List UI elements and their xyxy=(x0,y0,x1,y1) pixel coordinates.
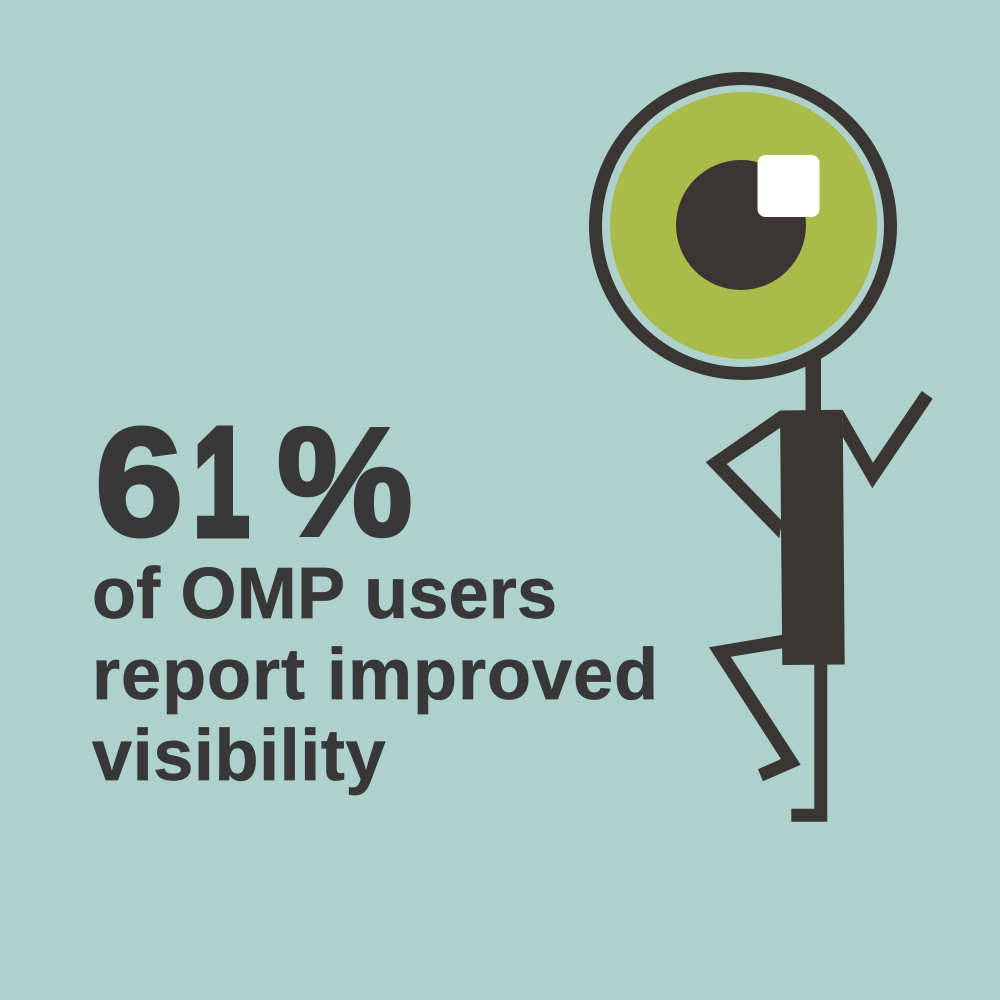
text line 2: report improved xyxy=(92,635,659,715)
body xyxy=(780,410,845,665)
neck xyxy=(806,355,821,412)
heading: 61% xyxy=(95,396,413,568)
standing leg xyxy=(791,660,827,822)
icon: pupil xyxy=(676,160,806,290)
bent leg xyxy=(709,635,801,781)
icon: green iris xyxy=(610,92,877,359)
text line 1: of OMP users xyxy=(92,554,557,634)
heading: 61%: % xyxy=(277,396,413,568)
icon: eye highlight xyxy=(758,155,820,217)
heading: 61%: 1 xyxy=(193,396,250,568)
text: of OMP users report improved visibility xyxy=(92,554,659,796)
heading: 61%: 6 xyxy=(95,396,183,568)
left arm xyxy=(706,410,782,538)
right arm xyxy=(843,391,933,488)
text line 3: visibility xyxy=(92,716,386,796)
icon: eye lens ring xyxy=(596,78,890,374)
